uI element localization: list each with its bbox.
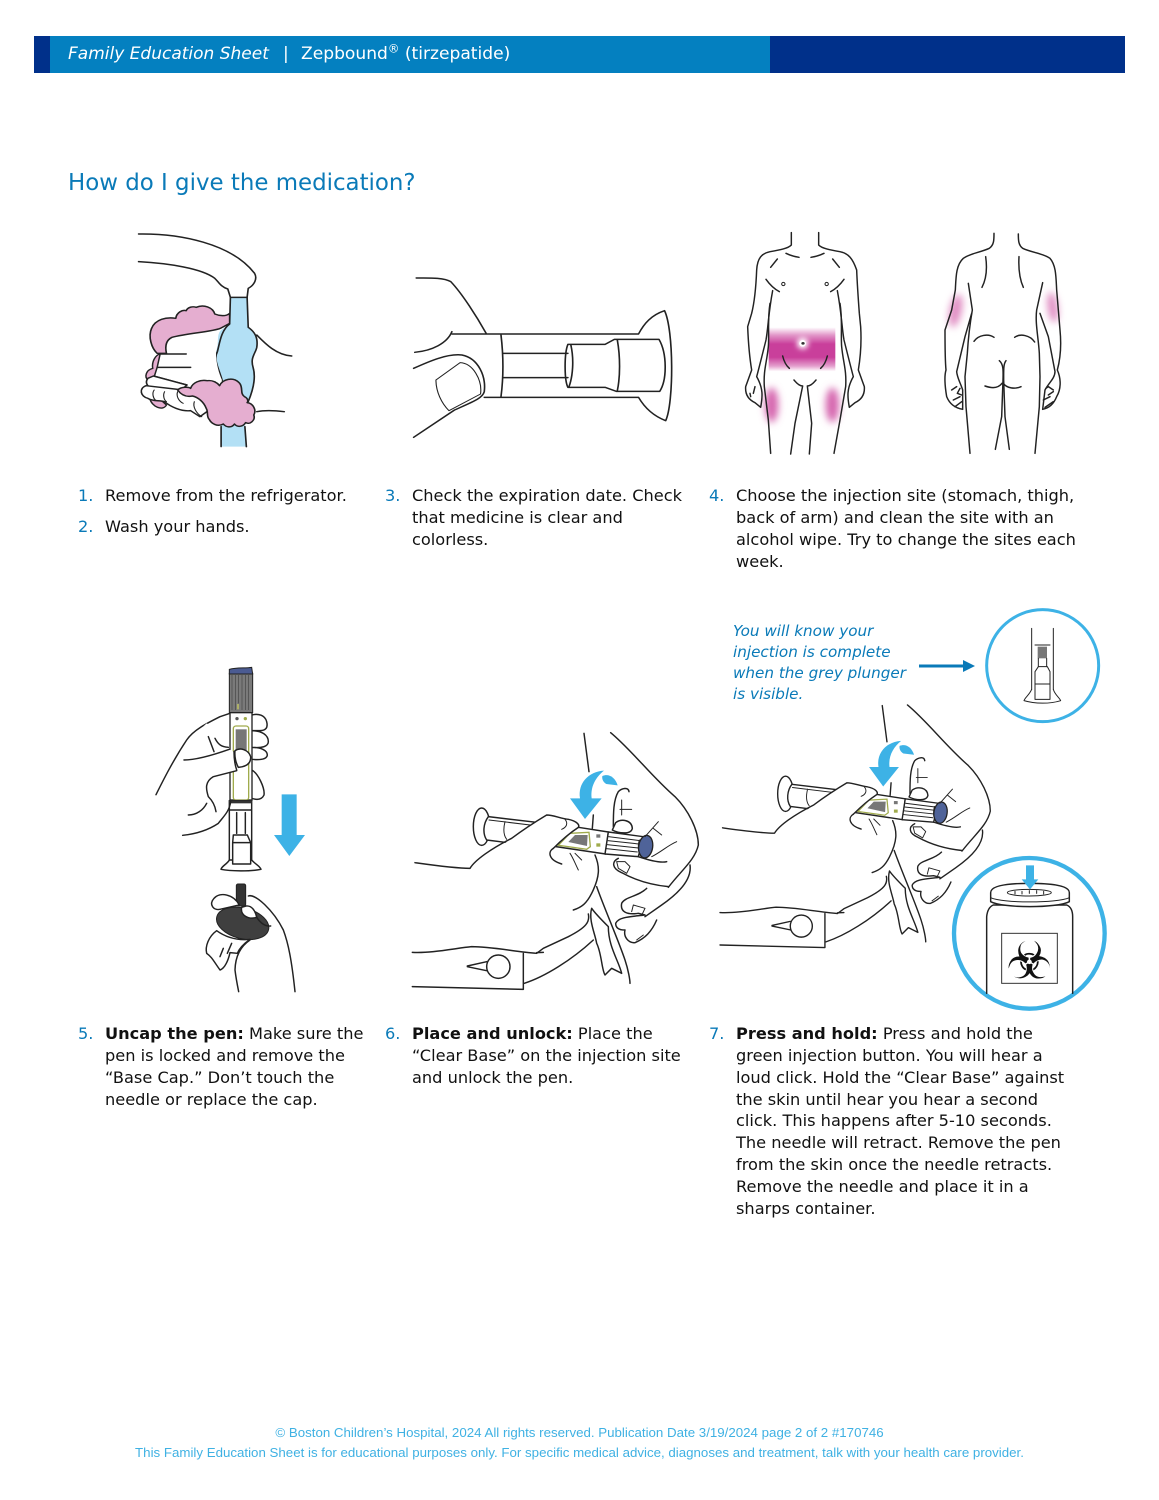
step 5 text: Uncap the pen: Make sure the [105, 1024, 363, 1043]
step 4 text: back of arm) and clean the site with an [736, 508, 1054, 527]
header title: Family Education Sheet [68, 44, 269, 64]
callout: injection complete: when the grey plunger [733, 664, 906, 682]
step 5 text: “Base Cap.” Don’t touch the [105, 1068, 334, 1087]
step 7 text [709, 1024, 1064, 1218]
step 5 text: pen is locked and remove the [105, 1046, 345, 1065]
step 6 text: and unlock the pen. [412, 1068, 573, 1087]
detail circle: sharps container [954, 858, 1105, 1009]
back figure [945, 233, 1061, 453]
text: 3. [385, 486, 400, 505]
step 6 text [385, 1024, 681, 1087]
step 4 text [709, 486, 1076, 571]
text: 2. [78, 517, 93, 536]
right hand fingers [613, 789, 629, 827]
step 4 text: Choose the injection site (stomach, thigh, [736, 486, 1074, 505]
text: 1. [78, 486, 93, 505]
step 3 text: Check the expiration date. Check [412, 486, 682, 505]
pink injection areas [765, 291, 1060, 422]
text: 5. [78, 1024, 93, 1043]
step 5 text: needle or replace the cap. [105, 1090, 318, 1109]
step 7 text: click. This happens after 5-10 seconds. [736, 1111, 1052, 1130]
footer: This Family Education Sheet is for educational purposes only. For specific medical advice, diagnoses and treatment, talk with your health care provider. [135, 1445, 1024, 1460]
illustration: uncapping the pen [156, 667, 305, 992]
left hand [412, 815, 600, 953]
wipe and body [591, 908, 622, 975]
arrow: to plunger detail [919, 660, 975, 672]
callout: injection complete: injection is complete [733, 643, 891, 661]
lower right hand [616, 865, 690, 943]
step 4 text: week. [736, 552, 784, 571]
footer [135, 1425, 1024, 1460]
arrow: down [274, 794, 305, 856]
detail circle: plunger visible [987, 610, 1099, 722]
steps 1 and 2 text: Remove from the refrigerator. [105, 486, 347, 505]
step 7 text: sharps container. [736, 1199, 875, 1218]
step 7 text: green injection button. You will hear a [736, 1046, 1043, 1065]
step 3 text [385, 486, 682, 549]
text: 7. [709, 1024, 724, 1043]
hand in front of pen [185, 723, 229, 759]
callout: injection complete [733, 622, 907, 703]
header title [68, 41, 510, 64]
steps 1 and 2 text: Wash your hands. [105, 517, 250, 536]
step 7 text: from the skin once the needle retracts. [736, 1155, 1052, 1174]
step 7 text: Press and hold: Press and hold the [736, 1024, 1033, 1043]
step 5 text [78, 1024, 363, 1109]
callout: injection complete: You will know your [733, 622, 873, 640]
header blue band [50, 36, 770, 73]
step 3 text: that medicine is clear and [412, 508, 623, 527]
illustration: placing and unlocking the pen [412, 733, 698, 989]
step 7 text: loud click. Hold the “Clear Base” against [736, 1068, 1064, 1087]
front figure [746, 233, 803, 454]
step 4 text: alcohol wipe. Try to change the sites each [736, 530, 1076, 549]
step 7 text: the skin until hear you hear a second [736, 1090, 1038, 1109]
hand holding cap [213, 902, 272, 945]
illustration: checking the pen window [414, 278, 672, 437]
callout: injection complete: is visible. [733, 685, 803, 703]
illustration: injection sites on body front and back [746, 233, 1061, 454]
header bar [34, 36, 1125, 73]
step 7 text: Remove the needle and place it in a [736, 1177, 1029, 1196]
header title: | [283, 44, 289, 64]
arrow: rotate unlock [570, 771, 604, 819]
heading: How do I give the medication? [68, 170, 416, 196]
step 6 text: Place and unlock: Place the [412, 1024, 653, 1043]
header title: Zepbound® (tirzepatide) [301, 41, 510, 64]
step 7 text: The needle will retract. Remove the pen [736, 1133, 1061, 1152]
illustration: press and hold [720, 705, 990, 948]
step 6 text: “Clear Base” on the injection site [412, 1046, 681, 1065]
detail circle: sharps container: ☣ [1006, 932, 1052, 992]
pen body [229, 673, 253, 713]
footer: © Boston Children’s Hospital, 2024 All rights reserved. Publication Date 3/19/2024 page 2 of 2 #170746 [275, 1425, 884, 1440]
step 3 text: colorless. [412, 530, 488, 549]
text: 6. [385, 1024, 400, 1043]
illustration: washing hands under faucet [139, 234, 292, 447]
steps 1 and 2 text [78, 486, 347, 536]
text: 4. [709, 486, 724, 505]
